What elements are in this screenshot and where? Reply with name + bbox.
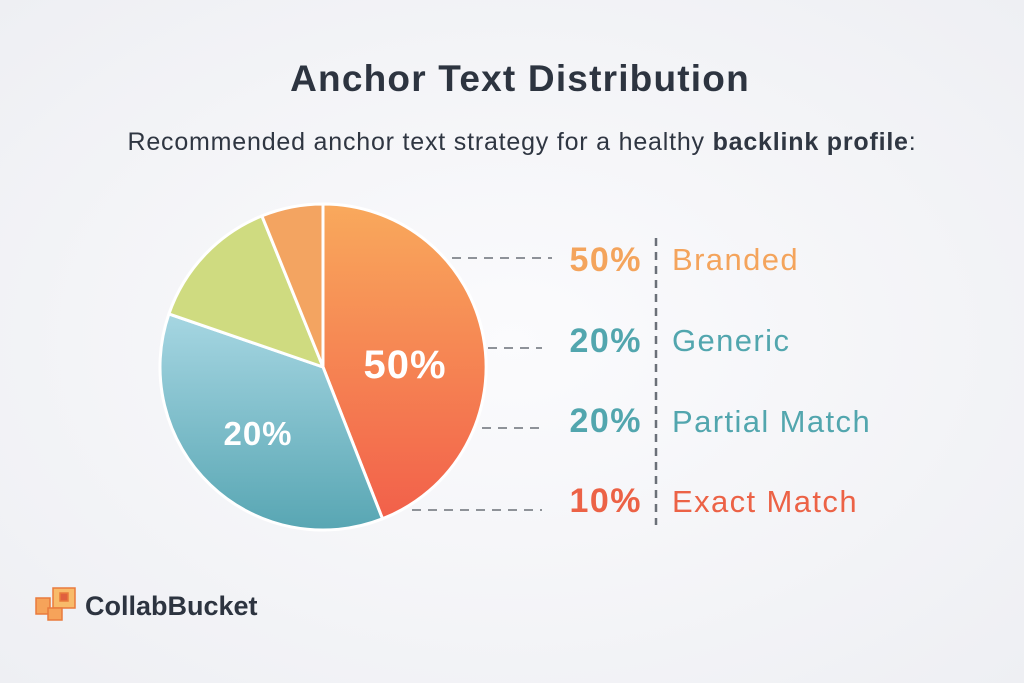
slice: partial match 20% [160, 314, 382, 530]
leader lines [412, 258, 552, 510]
slice: generic [169, 216, 323, 367]
legend: 20% [569, 402, 642, 440]
text: Branded [672, 242, 799, 277]
text: Partial Match [672, 404, 871, 439]
pie label 20%: 20% [223, 415, 293, 452]
pie chart [160, 204, 486, 530]
legend [569, 241, 642, 520]
vertical divider [655, 238, 657, 525]
title: Anchor Text Distribution [290, 58, 750, 99]
text: Exact Match [672, 484, 858, 519]
logo icon [36, 588, 75, 620]
slice: exact match [262, 204, 323, 367]
logo text: CollabBucket [85, 591, 258, 621]
legend: 10% [569, 482, 642, 520]
legend: 50% [569, 241, 642, 279]
pie label 50%: 50% [363, 343, 447, 387]
text: Generic [672, 323, 790, 358]
legend: 20% [569, 322, 642, 360]
slice: branded 50% [323, 204, 486, 519]
subtitle: Recommended anchor text strategy for a healthy backlink profile: [127, 128, 917, 156]
